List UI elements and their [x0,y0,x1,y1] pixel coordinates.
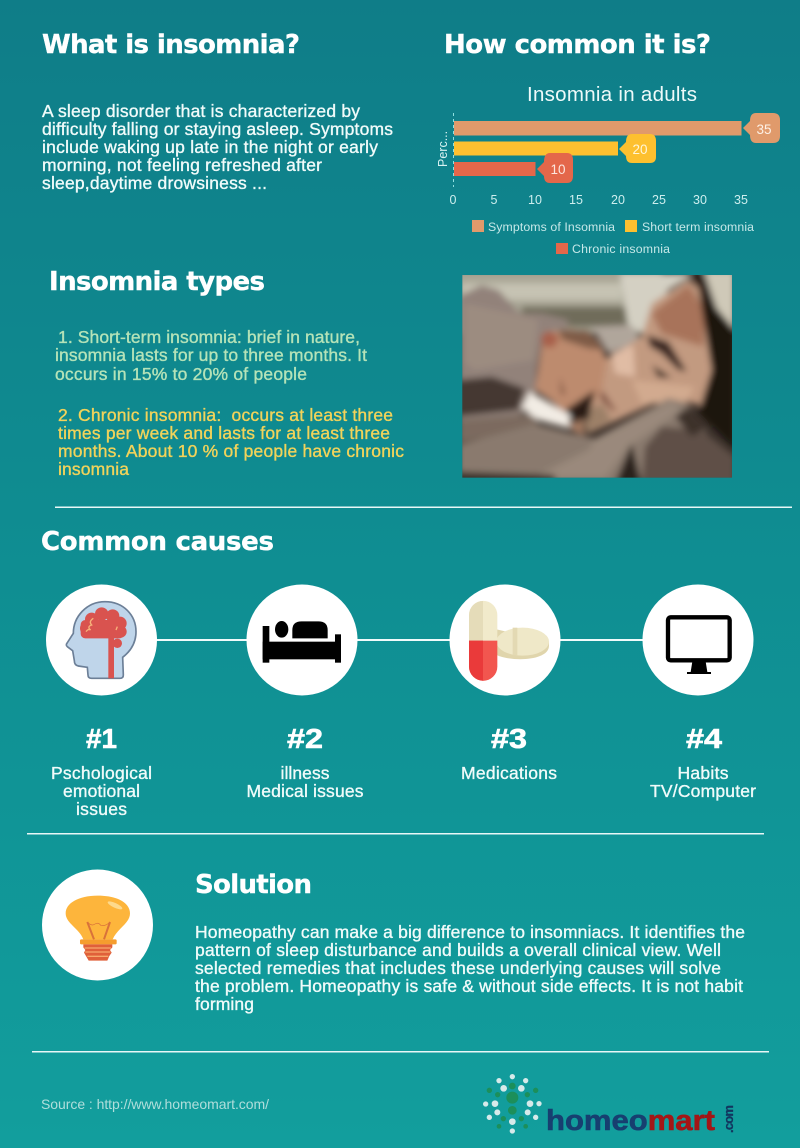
text block: insomnia definition [42,101,393,193]
text block: chronic insomnia: 2. Chronic insomnia: occurs at least three [58,405,393,425]
text block: solution: selected remedies that includes these underlying causes will solve [195,958,721,978]
x axis ticks: 20 [611,193,625,207]
bar: symptoms 35: 35 [756,122,772,137]
text block: chronic insomnia: months. About 10 % of people have chronic [58,441,404,461]
icon: pills [450,584,560,696]
bar chart: insomnia in adults [436,83,780,256]
bar: symptoms 35 [454,113,780,143]
number: #2 [287,723,323,754]
text block: chronic insomnia [58,405,404,479]
icon: light bulb [42,870,153,980]
x axis ticks: 10 [528,193,542,207]
divider [55,506,792,508]
label [51,763,152,819]
number: #1 [86,723,117,754]
bar: chronic 10 [454,153,573,183]
cause 2: illness [246,584,364,801]
cause 3: medications [450,584,560,783]
source text: Source : http://www.homeomart.com/ [41,1096,269,1112]
icon: monitor [642,584,754,696]
divider [27,833,764,834]
number: #3 [491,723,527,754]
divider [32,1051,769,1052]
logo: homeomart [483,1074,736,1137]
text block: insomnia definition: include waking up late in the night or early [42,137,378,157]
label: Habits [678,763,729,783]
icon: head with brain [46,584,157,696]
legend: Short term insomnia [642,220,754,234]
logo .com: .com [721,1105,736,1133]
text block: insomnia definition: sleep,daytime drowsiness ... [42,173,267,193]
text block: solution: Homeopathy can make a big difference to insomniacs. It identifies the [195,922,745,942]
label: Medications [461,763,557,783]
bar: short term 20: 20 [632,142,648,157]
label: Medical issues [246,781,364,801]
label [246,763,364,801]
text block: solution: the problem. Homeopathy is safe & without side effects. It is not habit [195,976,743,996]
text block: short-term insomnia: insomnia lasts for up to three months. It [55,345,367,365]
x axis ticks [450,193,748,207]
bar: chronic 10: 10 [550,162,566,177]
x axis ticks: 30 [693,193,707,207]
chart title: Insomnia in adults [527,83,697,106]
text block: chronic insomnia: insomnia [58,459,129,479]
heading: solution: Solution [195,870,312,900]
label: Pschological [51,763,152,783]
text block: short-term insomnia: occurs in 15% to 20% of people [55,364,307,384]
cause 4: habits [642,584,756,801]
text block: solution: pattern of sleep disturbance and builds a overall clinical view. Well [195,940,721,960]
label: issues [76,799,127,819]
axis label: Perc... [436,131,450,167]
connector line [150,639,650,641]
x axis ticks: 25 [652,193,666,207]
legend [472,220,754,256]
label: emotional [63,781,140,801]
heading: insomnia types: Insomnia types [49,267,265,297]
heading: common causes: Common causes [41,527,274,557]
text block: insomnia definition: A sleep disorder that is characterized by [42,101,360,121]
number: #4 [686,723,722,754]
text block: solution [195,922,745,1014]
text block: insomnia definition: difficulty falling or staying asleep. Symptoms [42,119,393,139]
text block: solution: forming [195,994,254,1014]
cause 1: psychological [46,584,157,819]
legend: Symptoms of Insomnia [488,220,615,234]
text block: chronic insomnia: times per week and lasts for at least three [58,423,390,443]
x axis ticks: 0 [450,193,457,207]
bar: short term 20 [454,134,656,163]
logo wordmark: homeomart [546,1105,715,1137]
x axis ticks: 15 [569,193,583,207]
legend: Chronic insomnia [572,242,670,256]
logo mark [483,1074,541,1133]
x axis ticks: 35 [734,193,748,207]
text block: insomnia definition: morning, not feeling refreshed after [42,155,322,175]
label [650,763,756,801]
text block: short-term insomnia [55,327,367,384]
heading: how common it is: How common it is? [444,30,711,60]
photo: father and sleeping baby [455,270,735,483]
text block: short-term insomnia: 1. Short-term insomnia: brief in nature, [58,327,360,347]
heading: what is insomnia: What is insomnia? [42,30,300,60]
x axis ticks: 5 [491,193,498,207]
icon: bed [246,584,358,696]
label: TV/Computer [650,781,756,801]
label: illness [280,763,330,783]
